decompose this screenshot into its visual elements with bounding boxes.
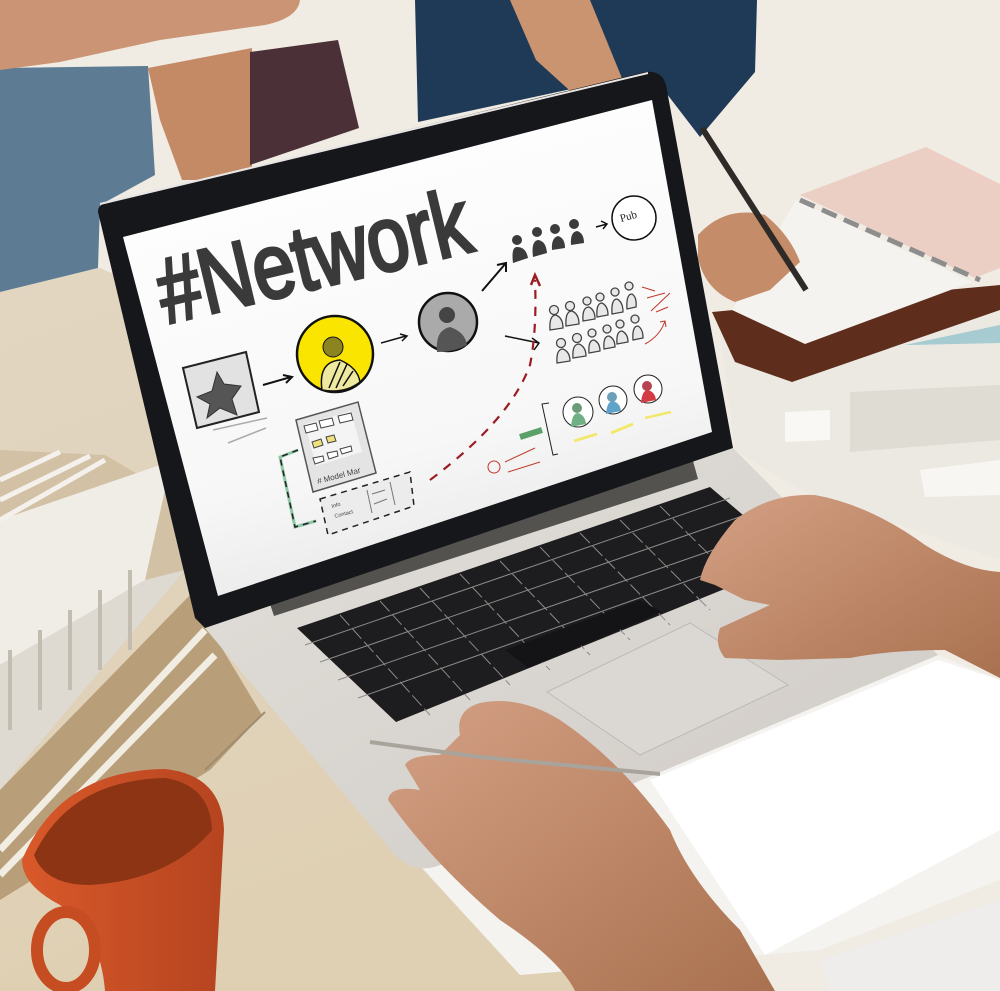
pink cover [800, 147, 1000, 278]
trackpad [547, 623, 788, 755]
arrow: to outlined group [505, 336, 539, 350]
white papers lower right [422, 655, 1000, 991]
person: forearm [148, 48, 252, 180]
hand: right hand on keyboard [700, 495, 1000, 678]
pencil [702, 128, 806, 290]
icon: gray person [419, 293, 477, 352]
notebook on the right [698, 128, 1000, 382]
laptop base [205, 448, 938, 868]
spacebar [505, 600, 662, 668]
icon: model form panel: # Model Mar [316, 466, 362, 486]
icon: green person [563, 397, 597, 441]
laptop screen bezel [98, 72, 733, 628]
arrow: yellow to gray person [381, 334, 407, 343]
blueprint paper right [720, 310, 1000, 560]
icon: outlined people group [550, 282, 643, 363]
pen [370, 742, 660, 774]
hinge [268, 461, 698, 616]
background chair [250, 40, 359, 165]
leather folder [712, 285, 1000, 382]
arrow: star to yellow person [263, 375, 292, 385]
mug opening [34, 778, 212, 885]
hand: left hand on desk [388, 701, 775, 991]
screen glare edge [100, 73, 648, 204]
icon: dashed detail panel: Info [331, 502, 341, 510]
person: arm center [510, 0, 626, 98]
title: #Network [147, 170, 481, 343]
icon: handwritten circle: Pub [619, 209, 639, 225]
display area [123, 100, 712, 596]
tabletop stripes [0, 595, 265, 900]
icon: star box [183, 352, 267, 443]
white page [732, 200, 972, 344]
icon: red person [634, 375, 671, 418]
bracket [542, 403, 558, 455]
coffee mug [22, 769, 224, 991]
screen [123, 100, 712, 596]
icon: model form panel [296, 402, 376, 492]
icon: dashed detail panel [320, 472, 414, 535]
background: wooden table left [0, 268, 620, 991]
icon: blue person [599, 386, 633, 433]
architecture model left [0, 450, 185, 790]
icon: yellow person [297, 316, 373, 392]
mug handle [37, 912, 95, 988]
icon: handwritten circle [612, 196, 656, 240]
arrow: to dark group [482, 263, 506, 291]
arrow: red dashed curve [430, 280, 535, 480]
icon: dark people group [512, 219, 584, 263]
red note bottom [488, 448, 540, 473]
person: jeans left [0, 66, 155, 292]
green connector [280, 450, 316, 527]
person: upper arm [0, 0, 300, 70]
binder rings [800, 200, 980, 280]
icon: dashed detail panel: Contact [334, 509, 354, 520]
green note [520, 430, 542, 437]
keyboard [297, 487, 796, 722]
blueprint strip [905, 325, 1000, 345]
arrow: group to circle [596, 221, 607, 229]
red notes [642, 287, 670, 344]
silver deck [205, 448, 938, 868]
dashed connector [280, 450, 316, 527]
arrow head red [531, 275, 540, 286]
person: navy clothes center [415, 0, 757, 137]
writing hand [698, 212, 800, 302]
